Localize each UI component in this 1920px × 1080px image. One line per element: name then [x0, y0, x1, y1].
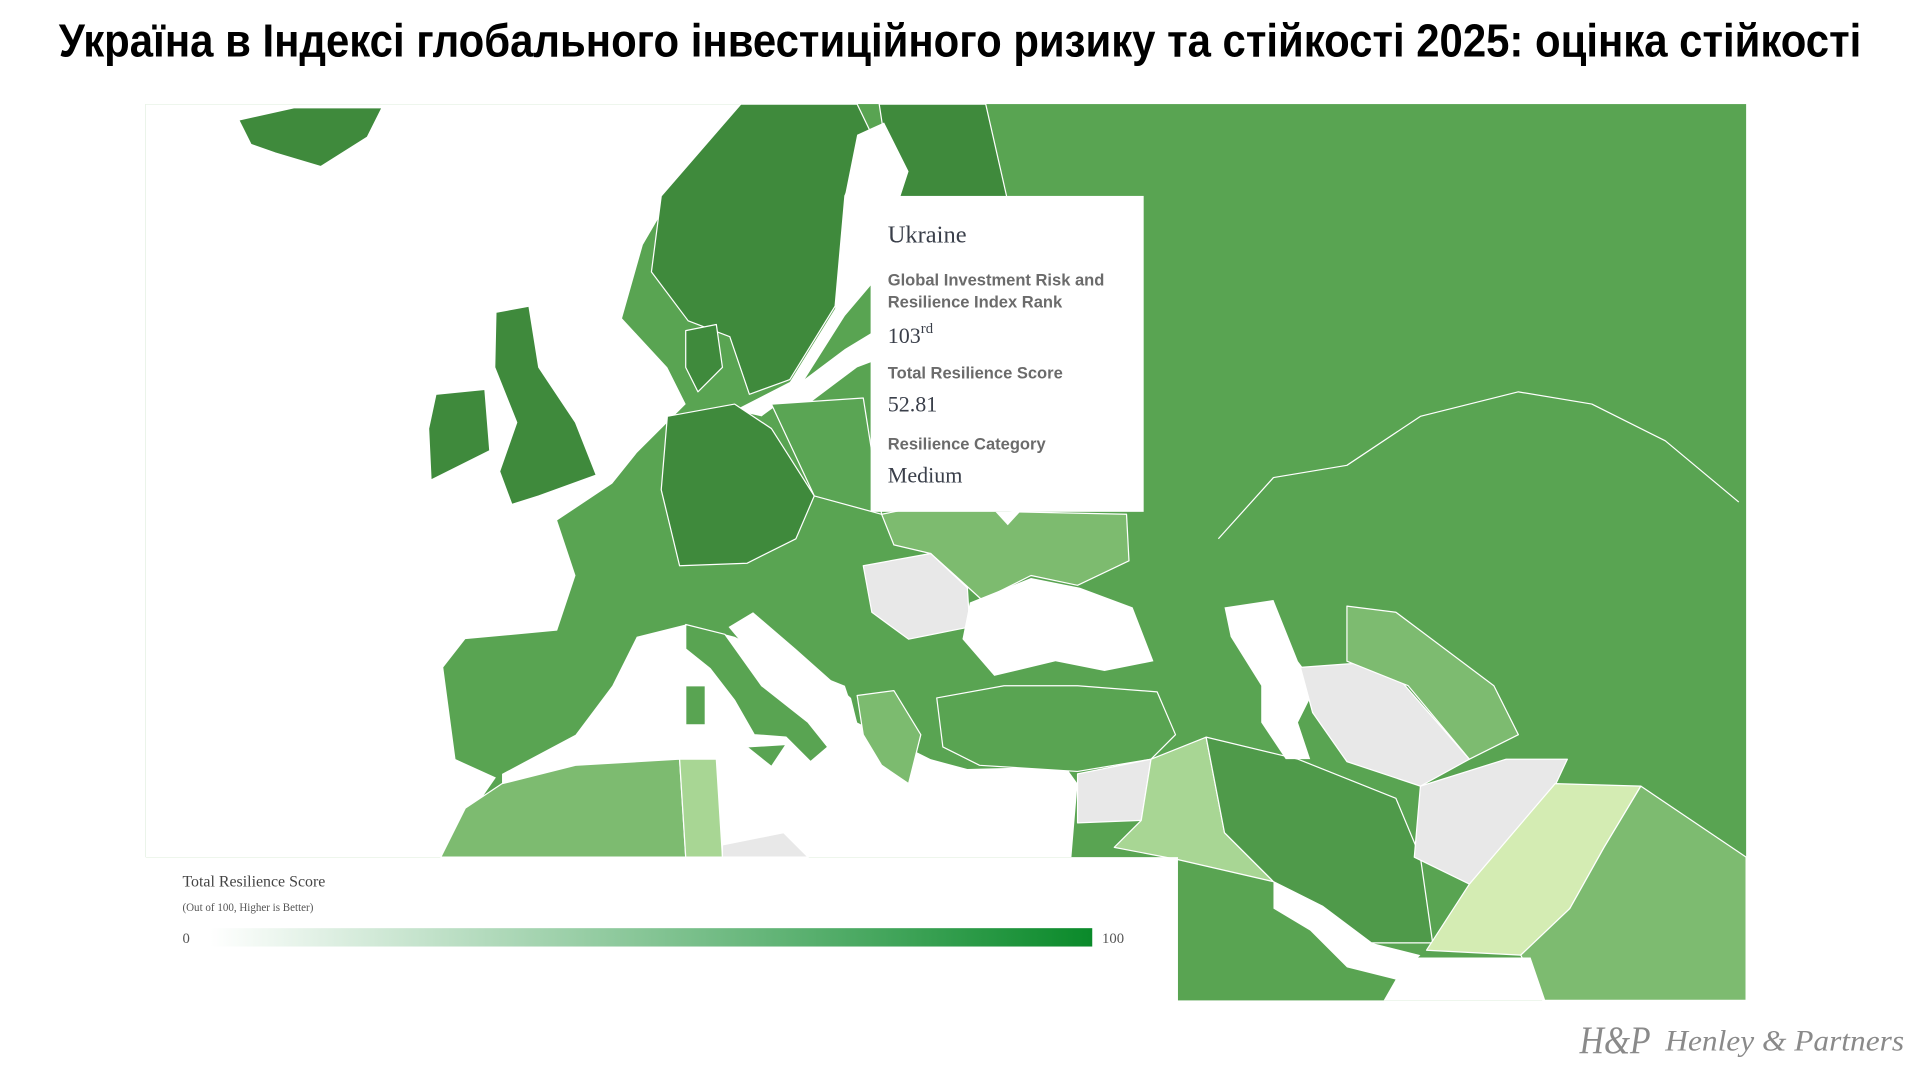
- ireland: [429, 389, 490, 480]
- tooltip: Ukraine: Medium: [888, 462, 962, 487]
- tooltip: Ukraine: Total Resilience Score: [888, 363, 1063, 382]
- legend panel: 100: [1102, 931, 1124, 947]
- turkmenistan: [1300, 661, 1469, 786]
- finland: [867, 104, 1007, 321]
- india: [1521, 786, 1746, 1000]
- legend panel: 0: [182, 931, 190, 947]
- map: [146, 104, 1746, 1000]
- poland: [771, 398, 882, 514]
- persian gulf: [1273, 882, 1420, 980]
- logo: Henley & Partners: Henley & Partners: [1664, 1026, 1904, 1058]
- ukraine: [882, 502, 1129, 600]
- iceland: [239, 108, 382, 167]
- gulf of bothnia / baltic: [735, 122, 909, 416]
- greece: [857, 691, 921, 784]
- romania: [863, 553, 970, 639]
- logo: Henley & Partners: H&P: [1579, 1019, 1651, 1062]
- tooltip: Ukraine: rd: [921, 321, 934, 337]
- legend title: Total Resilience Score: [182, 874, 325, 891]
- germany czech austria: [661, 404, 814, 566]
- north africa: [441, 759, 686, 857]
- norway sweden: [651, 104, 872, 394]
- legend panel: [144, 857, 1178, 1002]
- iraq: [1114, 737, 1273, 882]
- sicily sardinia: [747, 744, 786, 767]
- arabian sea: [1384, 958, 1545, 1000]
- kazakhstan outline: [1218, 392, 1739, 539]
- tooltip: Ukraine: Resilience Category: [888, 434, 1046, 453]
- tooltip: Ukraine: Resilience Index Rank: [888, 292, 1063, 311]
- land base: [146, 104, 1746, 1000]
- UK: [495, 306, 596, 504]
- afghanistan: [1414, 759, 1567, 884]
- tooltip: Ukraine: Ukraine: [888, 221, 967, 248]
- iran: [1206, 737, 1433, 943]
- denmark: [686, 324, 722, 392]
- tooltip: Ukraine: [871, 196, 1144, 525]
- syria: [1078, 759, 1151, 823]
- logo: Henley & Partners: [1579, 1019, 1904, 1062]
- atlantic ocean: [146, 104, 741, 857]
- tooltip: Ukraine: 52.81: [888, 391, 937, 416]
- legend subtitle: (Out of 100, Higher is Better): [182, 902, 314, 914]
- turkey: [937, 686, 1176, 771]
- adriatic: [729, 612, 857, 722]
- tooltip: Ukraine: 103: [888, 323, 921, 348]
- mediterranean: [502, 624, 1078, 857]
- tooltip: Ukraine: Global Investment Risk and: [888, 270, 1104, 289]
- black sea: [962, 578, 1153, 676]
- caspian: [1224, 600, 1316, 759]
- uzbekistan: [1347, 606, 1518, 759]
- pakistan: [1427, 784, 1641, 955]
- italy: [686, 624, 828, 762]
